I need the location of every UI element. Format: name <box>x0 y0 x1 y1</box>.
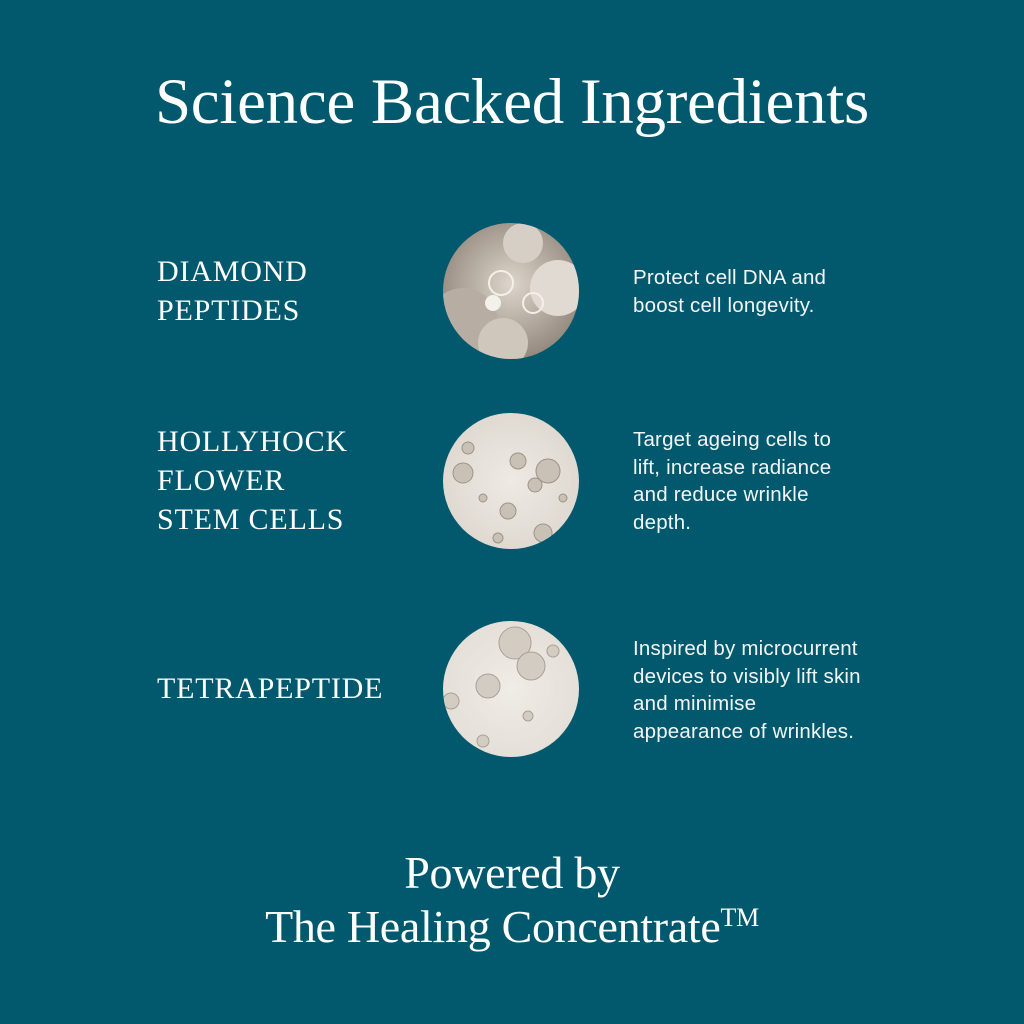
label: diamond peptides: DIAMOND <box>157 255 308 288</box>
footer: powered by <box>265 847 759 952</box>
description: hollyhock: depth. <box>633 510 691 534</box>
description: hollyhock <box>633 428 831 534</box>
description: hollyhock: lift, increase radiance <box>633 456 831 478</box>
image: tetrapeptide bubbles <box>443 621 579 757</box>
label: diamond peptides: PEPTIDES <box>157 294 300 327</box>
label: hollyhock: FLOWER <box>157 464 285 497</box>
label: diamond peptides <box>157 255 308 327</box>
label: hollyhock: STEM CELLS <box>157 503 344 536</box>
description: tetrapeptide: appearance of wrinkles. <box>633 720 854 742</box>
footer: powered by: The Healing ConcentrateTM <box>265 901 759 952</box>
description: tetrapeptide: Inspired by microcurrent <box>633 637 858 660</box>
image: hollyhock bubbles <box>443 413 579 549</box>
footer: powered by: Powered by <box>404 847 620 898</box>
image: diamond peptides bubbles <box>443 223 579 359</box>
description: diamond peptides: Protect cell DNA and <box>633 266 826 289</box>
description: diamond peptides: boost cell longevity. <box>633 294 815 316</box>
description: tetrapeptide: and minimise <box>633 692 756 715</box>
label: hollyhock <box>157 425 348 536</box>
title: Science Backed Ingredients <box>155 66 869 138</box>
description: diamond peptides <box>633 266 826 316</box>
description: hollyhock: Target ageing cells to <box>633 428 831 451</box>
description: tetrapeptide <box>633 637 861 742</box>
description: tetrapeptide: devices to visibly lift skin <box>633 664 861 688</box>
label: hollyhock: HOLLYHOCK <box>157 425 348 458</box>
description: hollyhock: and reduce wrinkle <box>633 483 809 506</box>
label: tetrapeptide: TETRAPEPTIDE <box>157 672 383 705</box>
